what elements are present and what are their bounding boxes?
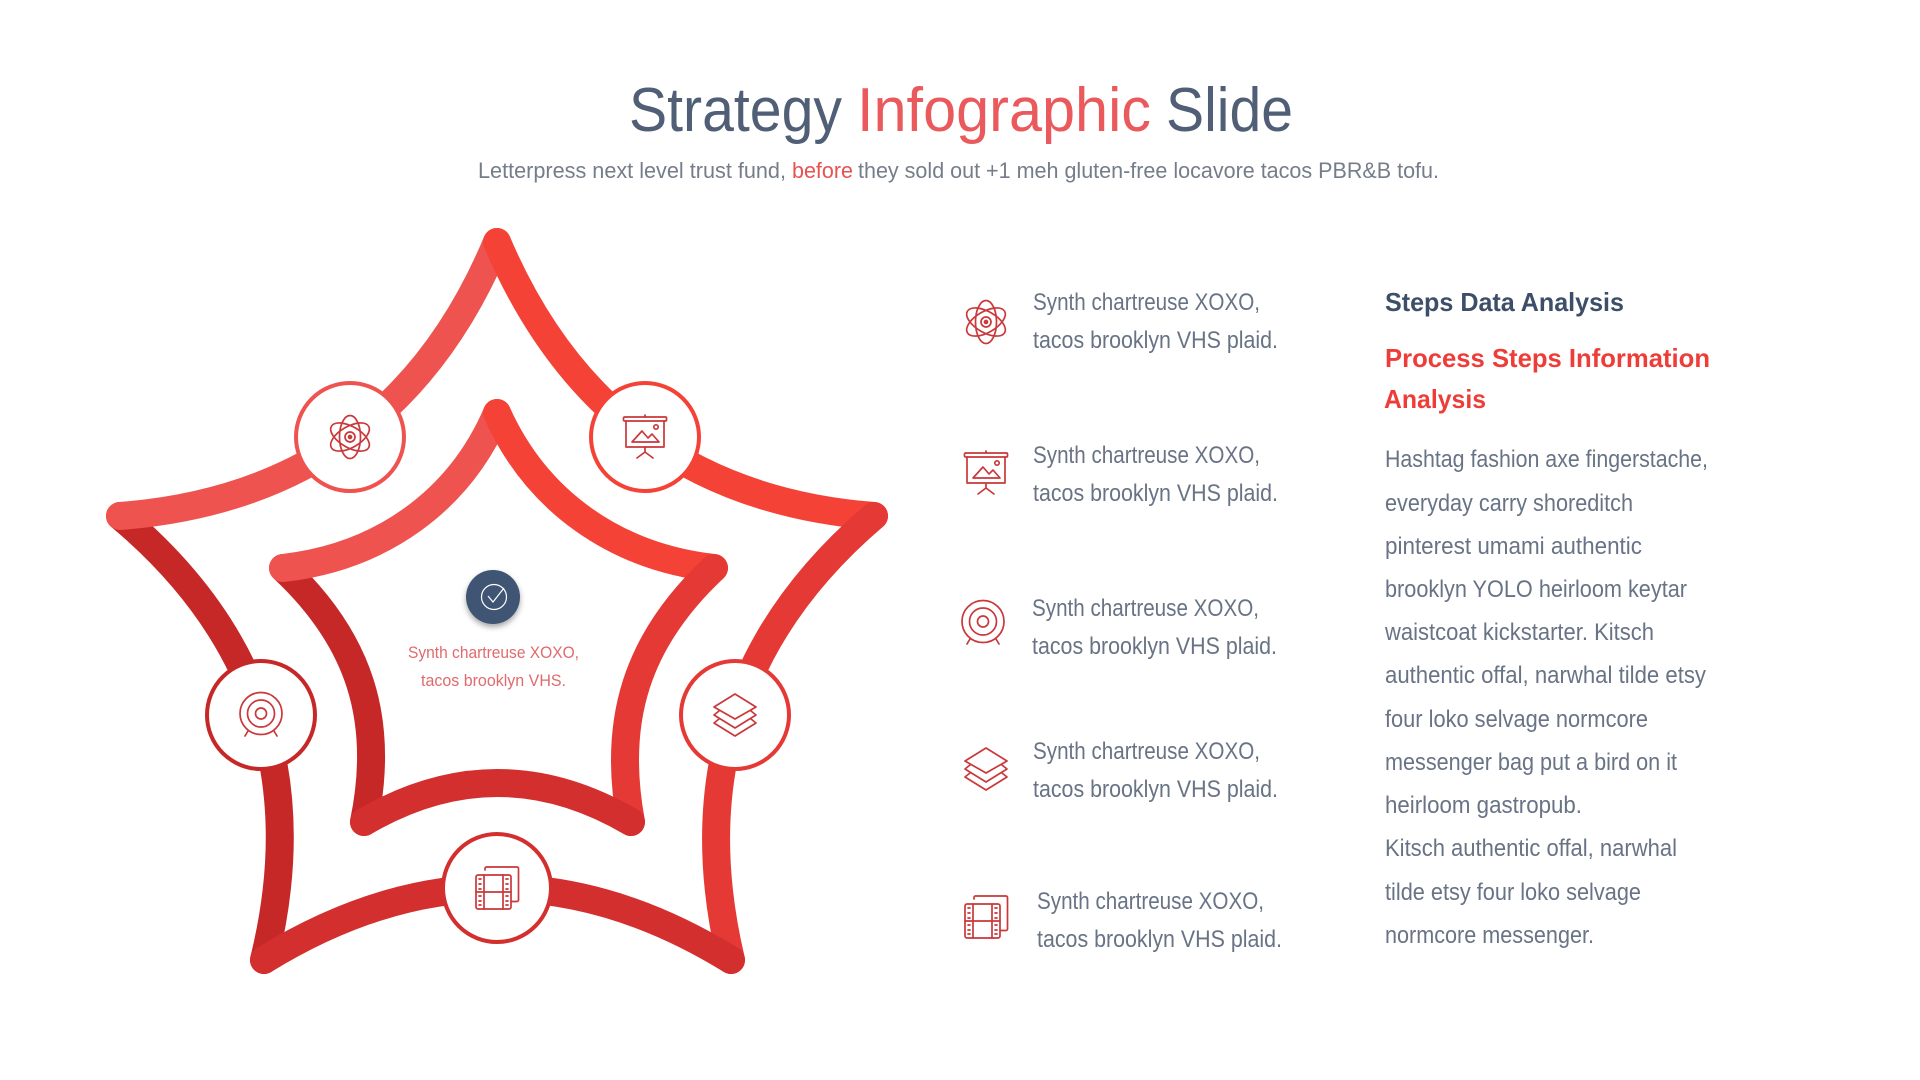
list item 5: [965, 888, 1282, 953]
list item 5: tacos brooklyn VHS plaid.: [1037, 926, 1282, 953]
body paragraph: tilde etsy four loko selvage: [1385, 879, 1641, 906]
body paragraph: messenger bag put a bird on it: [1385, 749, 1677, 776]
center check badge: [466, 570, 520, 624]
heading: steps data analysis: Steps Data Analysis: [1385, 287, 1624, 317]
inner star ribbon: [283, 413, 714, 822]
list item 4: tacos brooklyn VHS plaid.: [1033, 776, 1278, 803]
body paragraph: [1384, 446, 1708, 949]
body paragraph: waistcoat kickstarter. Kitsch: [1384, 619, 1654, 646]
subtitle: before: [792, 158, 853, 183]
title: Strategy: [629, 76, 842, 145]
node: atom: [296, 383, 404, 491]
subtitle: [478, 158, 1439, 183]
body paragraph: heirloom gastropub.: [1385, 792, 1582, 819]
list item 1: Synth chartreuse XOXO,: [1033, 289, 1260, 316]
body paragraph: authentic offal, narwhal tilde etsy: [1385, 662, 1706, 689]
list item 3: Synth chartreuse XOXO,: [1032, 595, 1259, 622]
list item 3: [962, 595, 1277, 660]
heading: process steps: Process Steps Information: [1385, 343, 1710, 373]
body paragraph: everyday carry shoreditch: [1385, 490, 1633, 517]
node: presentation: [591, 383, 699, 491]
body paragraph: four loko selvage normcore: [1385, 706, 1648, 733]
star diagram: [120, 242, 874, 960]
body paragraph: normcore messenger.: [1385, 922, 1594, 949]
node: layers: [681, 661, 789, 769]
heading: process steps: Analysis: [1384, 384, 1486, 414]
list item 3: tacos brooklyn VHS plaid.: [1032, 633, 1277, 660]
node: film: [443, 834, 551, 942]
center caption: tacos brooklyn VHS.: [421, 671, 566, 690]
list item 4: [965, 738, 1278, 803]
body paragraph: Kitsch authentic offal, narwhal: [1385, 835, 1677, 862]
subtitle: Letterpress next level trust fund,: [478, 158, 786, 183]
list item 2: tacos brooklyn VHS plaid.: [1033, 480, 1278, 507]
body paragraph: brooklyn YOLO heirloom keytar: [1385, 576, 1687, 603]
list item 1: tacos brooklyn VHS plaid.: [1033, 327, 1278, 354]
list item 1: [962, 289, 1278, 354]
list item 5: Synth chartreuse XOXO,: [1037, 888, 1264, 915]
node: target: [207, 661, 315, 769]
list item 4: Synth chartreuse XOXO,: [1033, 738, 1260, 765]
title: Slide: [1166, 76, 1293, 145]
list item 2: Synth chartreuse XOXO,: [1033, 442, 1260, 469]
title: [629, 76, 1293, 145]
title: Infographic: [857, 76, 1151, 145]
center caption: [408, 643, 579, 690]
outer star ribbon: [120, 242, 874, 960]
body paragraph: Hashtag fashion axe fingerstache,: [1385, 446, 1708, 473]
heading: process steps: [1384, 343, 1710, 414]
subtitle: they sold out +1 meh gluten-free locavore tacos PBR&B tofu.: [858, 158, 1439, 183]
center caption: Synth chartreuse XOXO,: [408, 643, 579, 662]
list item 2: [964, 442, 1278, 507]
body paragraph: pinterest umami authentic: [1385, 533, 1642, 560]
